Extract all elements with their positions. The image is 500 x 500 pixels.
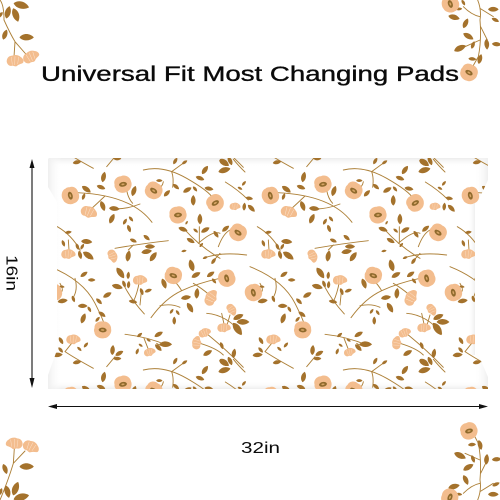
label: 32in: 32in (241, 440, 280, 457)
label: 16in: 16in (2, 255, 20, 291)
sprig: bottom left (0, 438, 41, 500)
panel: changing pad with floral pattern (48, 158, 488, 389)
sprig: bottom right (439, 420, 500, 500)
arrow: width dimension (48, 404, 488, 409)
sprig: top left (0, 0, 41, 66)
arrow: height dimension (30, 159, 34, 388)
title: Universal Fit Most Changing Pads (41, 63, 459, 86)
sprig: top right (439, 0, 500, 84)
